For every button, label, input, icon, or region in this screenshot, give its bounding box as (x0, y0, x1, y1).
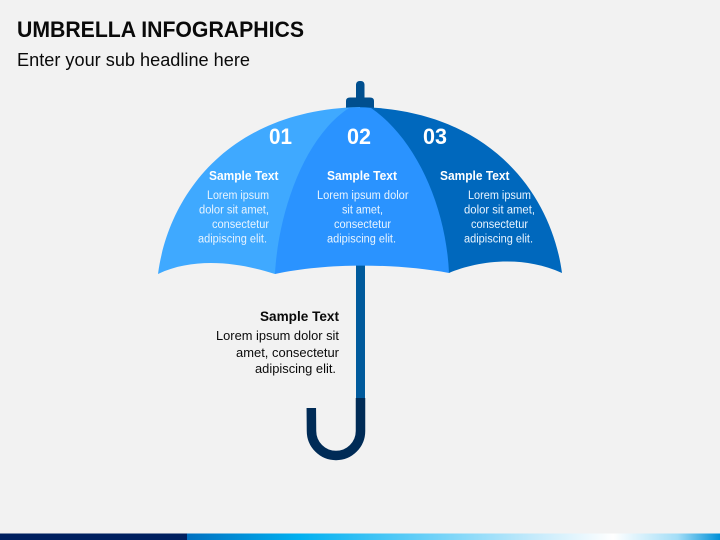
body text 03 (464, 190, 535, 246)
body text 01 (198, 190, 269, 246)
body text 01: adipiscing elit. (198, 234, 267, 246)
callout text beside handle (216, 308, 340, 376)
body text 01: dolor sit amet, (199, 204, 269, 216)
canopy panel 3 (360, 107, 562, 273)
umbrella shaft (356, 262, 365, 399)
body text 03: dolor sit amet, (464, 204, 535, 216)
callout body: Lorem ipsum dolor sit (216, 328, 339, 343)
body text 02: Lorem ipsum dolor (317, 190, 409, 202)
subtitle: Enter your sub headline here (17, 50, 250, 70)
body text 03: adipiscing elit. (464, 234, 533, 246)
umbrella top knob (346, 81, 374, 108)
body text 02: sit amet, (342, 204, 383, 216)
canopy panel 1 (158, 107, 360, 274)
body text 02: adipiscing elit. (327, 234, 396, 246)
footer bar (0, 534, 720, 540)
callout heading: Sample Text (260, 308, 339, 324)
panel text 01 (198, 124, 292, 246)
callout body (216, 328, 340, 376)
callout body: amet, consectetur (236, 345, 340, 360)
number 03: 03 (423, 124, 447, 149)
heading 03: Sample Text (440, 169, 510, 183)
body text 01: consectetur (212, 219, 269, 231)
title: UMBRELLA INFOGRAPHICS (17, 17, 304, 42)
body text 02: consectetur (334, 219, 391, 231)
body text 03: Lorem ipsum (468, 190, 531, 202)
umbrella hook handle (311, 398, 360, 456)
callout body: adipiscing elit. (255, 361, 336, 376)
panel text 03 (423, 124, 535, 246)
heading 02: Sample Text (327, 169, 398, 183)
panel text 02 (317, 124, 409, 246)
number 01: 01 (269, 124, 292, 149)
heading 01: Sample Text (209, 169, 279, 183)
body text 01: Lorem ipsum (207, 190, 269, 202)
body text 02 (317, 190, 409, 246)
canopy panel 2 (275, 107, 449, 274)
umbrella (158, 81, 562, 456)
body text 03: consectetur (471, 219, 528, 231)
number 02: 02 (347, 124, 371, 149)
